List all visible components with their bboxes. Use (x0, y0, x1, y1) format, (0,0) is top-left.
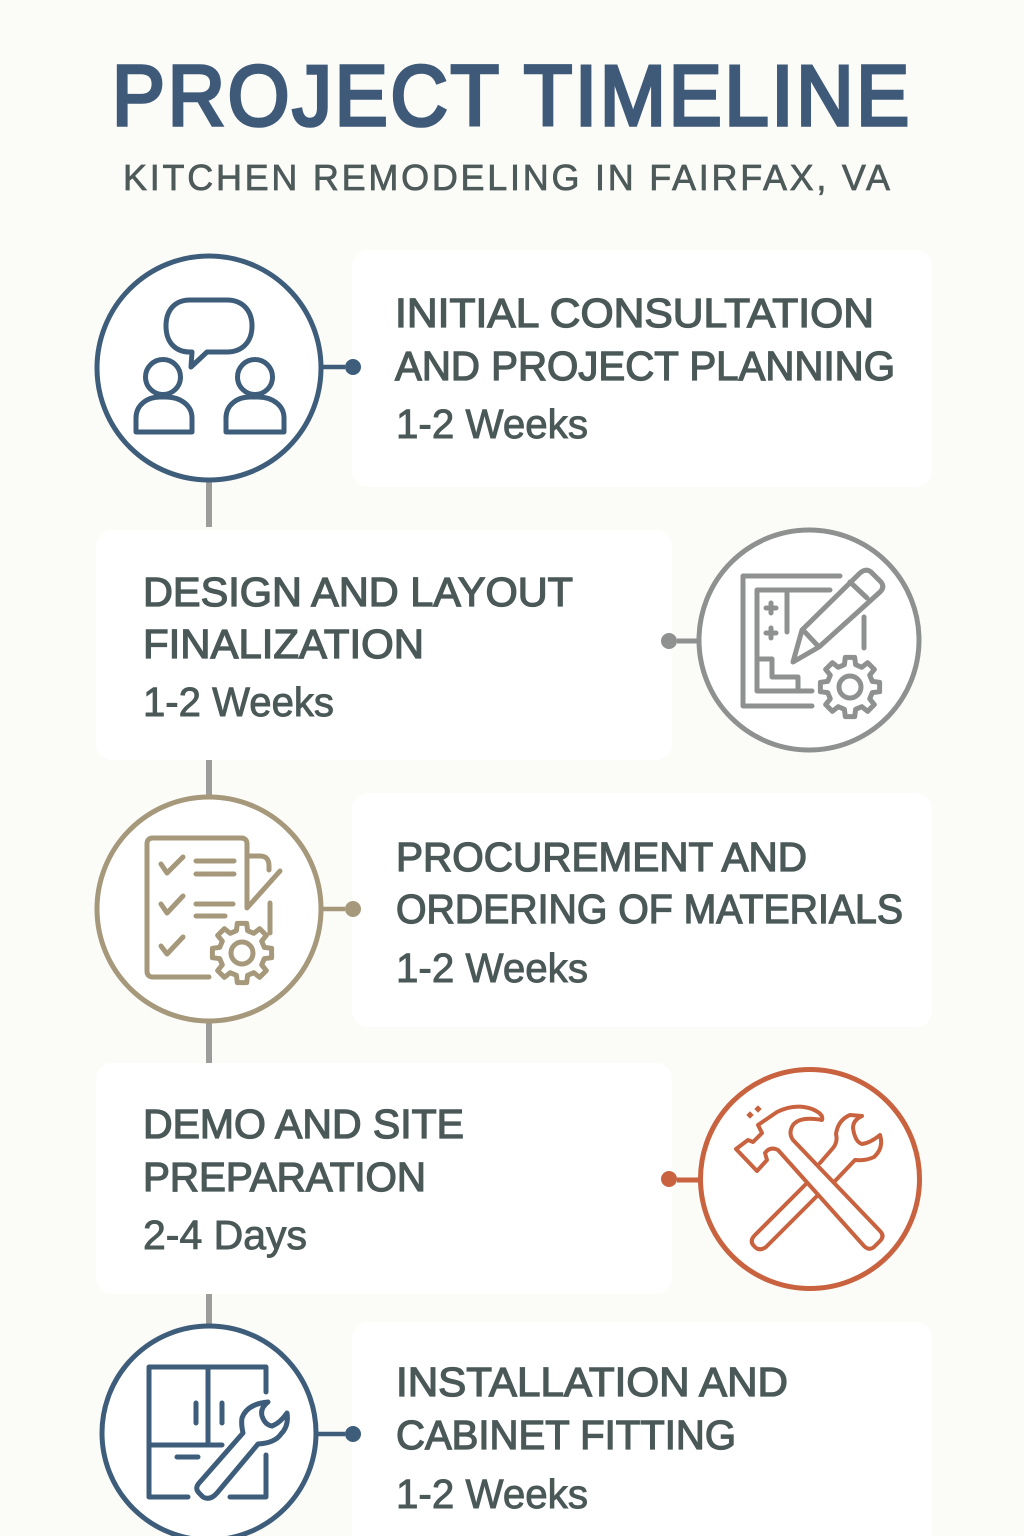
timeline connector: step 3 to 4 (206, 1020, 212, 1063)
icon: step 3 checklist (97, 797, 360, 1021)
icon: step 5 cabinet and wrench (102, 1326, 360, 1536)
step 1 heading line 1: INITIAL CONSULTATION (395, 290, 874, 336)
step 4 duration: 2-4 Days (143, 1212, 307, 1258)
step 5 heading line 2: CABINET FITTING (396, 1412, 736, 1458)
step 4 heading line 2: PREPARATION (143, 1154, 426, 1200)
step 1 duration: 1-2 Weeks (396, 401, 588, 447)
step 2 duration: 1-2 Weeks (143, 679, 334, 725)
panel: step 2 design and layout (96, 530, 672, 760)
icon: step 1 consultation (97, 256, 360, 480)
timeline connector: step 2 to 3 (206, 760, 212, 797)
panel: step 1 initial consultation (352, 250, 932, 487)
step 5 heading line 1: INSTALLATION AND (396, 1359, 788, 1405)
step 3 heading line 2: ORDERING OF MATERIALS (396, 886, 903, 932)
timeline connector: step 4 to 5 (206, 1294, 212, 1326)
step 3 heading line 1: PROCUREMENT AND (396, 834, 807, 880)
step 5 duration: 1-2 Weeks (396, 1471, 588, 1517)
step 1 heading line 2: AND PROJECT PLANNING (395, 343, 895, 389)
step 3 duration: 1-2 Weeks (396, 945, 588, 991)
panel: step 5 installation and cabinet fitting (352, 1322, 932, 1536)
panel: step 3 procurement (352, 793, 932, 1027)
step 2 heading line 1: DESIGN AND LAYOUT (143, 569, 573, 615)
icon: step 4 hammer and wrench (662, 1070, 920, 1288)
title: PROJECT TIMELINE (112, 49, 912, 144)
subtitle: KITCHEN REMODELING IN FAIRFAX, VA (123, 157, 890, 198)
icon: step 2 blueprint and pencil (662, 530, 919, 750)
step 2 heading line 2: FINALIZATION (143, 621, 424, 667)
step 4 heading line 1: DEMO AND SITE (143, 1101, 464, 1147)
panel: step 4 demo and site preparation (96, 1063, 672, 1294)
timeline connector: step 1 to 2 (206, 480, 212, 527)
